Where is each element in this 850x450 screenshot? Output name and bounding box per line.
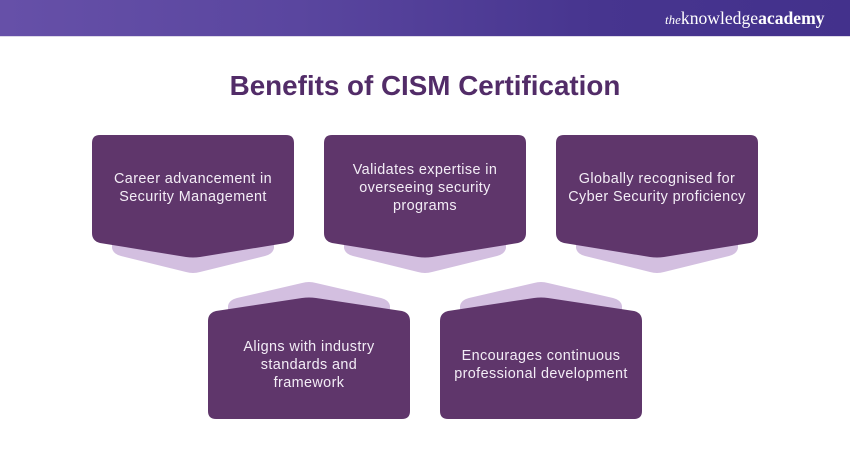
card 4 text: framework (274, 375, 344, 391)
card 1 text (114, 171, 272, 205)
card 1 text: Career advancement in (114, 171, 272, 187)
card 5 shape (440, 282, 642, 419)
card 4 text: standards and (261, 357, 357, 373)
title: Benefits of CISM Certification (230, 70, 620, 101)
header banner (0, 0, 850, 37)
card 2 text: programs (393, 198, 457, 214)
card 2 text: overseeing security (359, 180, 491, 196)
card 3 text: Cyber Security proficiency (568, 189, 746, 205)
card 3 text: Globally recognised for (579, 171, 735, 187)
card 5 text (454, 348, 628, 382)
card 4 text: Aligns with industry (243, 339, 375, 355)
card 3 shape (556, 135, 758, 273)
card 1 text: Security Management (119, 189, 267, 205)
card 2 shape (324, 135, 526, 273)
card 5 text: professional development (454, 366, 628, 382)
logo: theknowledgeacademy (665, 8, 825, 28)
card 3 text (568, 171, 746, 205)
card 4 text (243, 339, 375, 391)
card 5 text: Encourages continuous (462, 348, 620, 364)
card 2 text: Validates expertise in (353, 162, 497, 178)
card 4 shape (208, 282, 410, 419)
card 1 shape (92, 135, 294, 273)
card 2 text (352, 162, 497, 214)
